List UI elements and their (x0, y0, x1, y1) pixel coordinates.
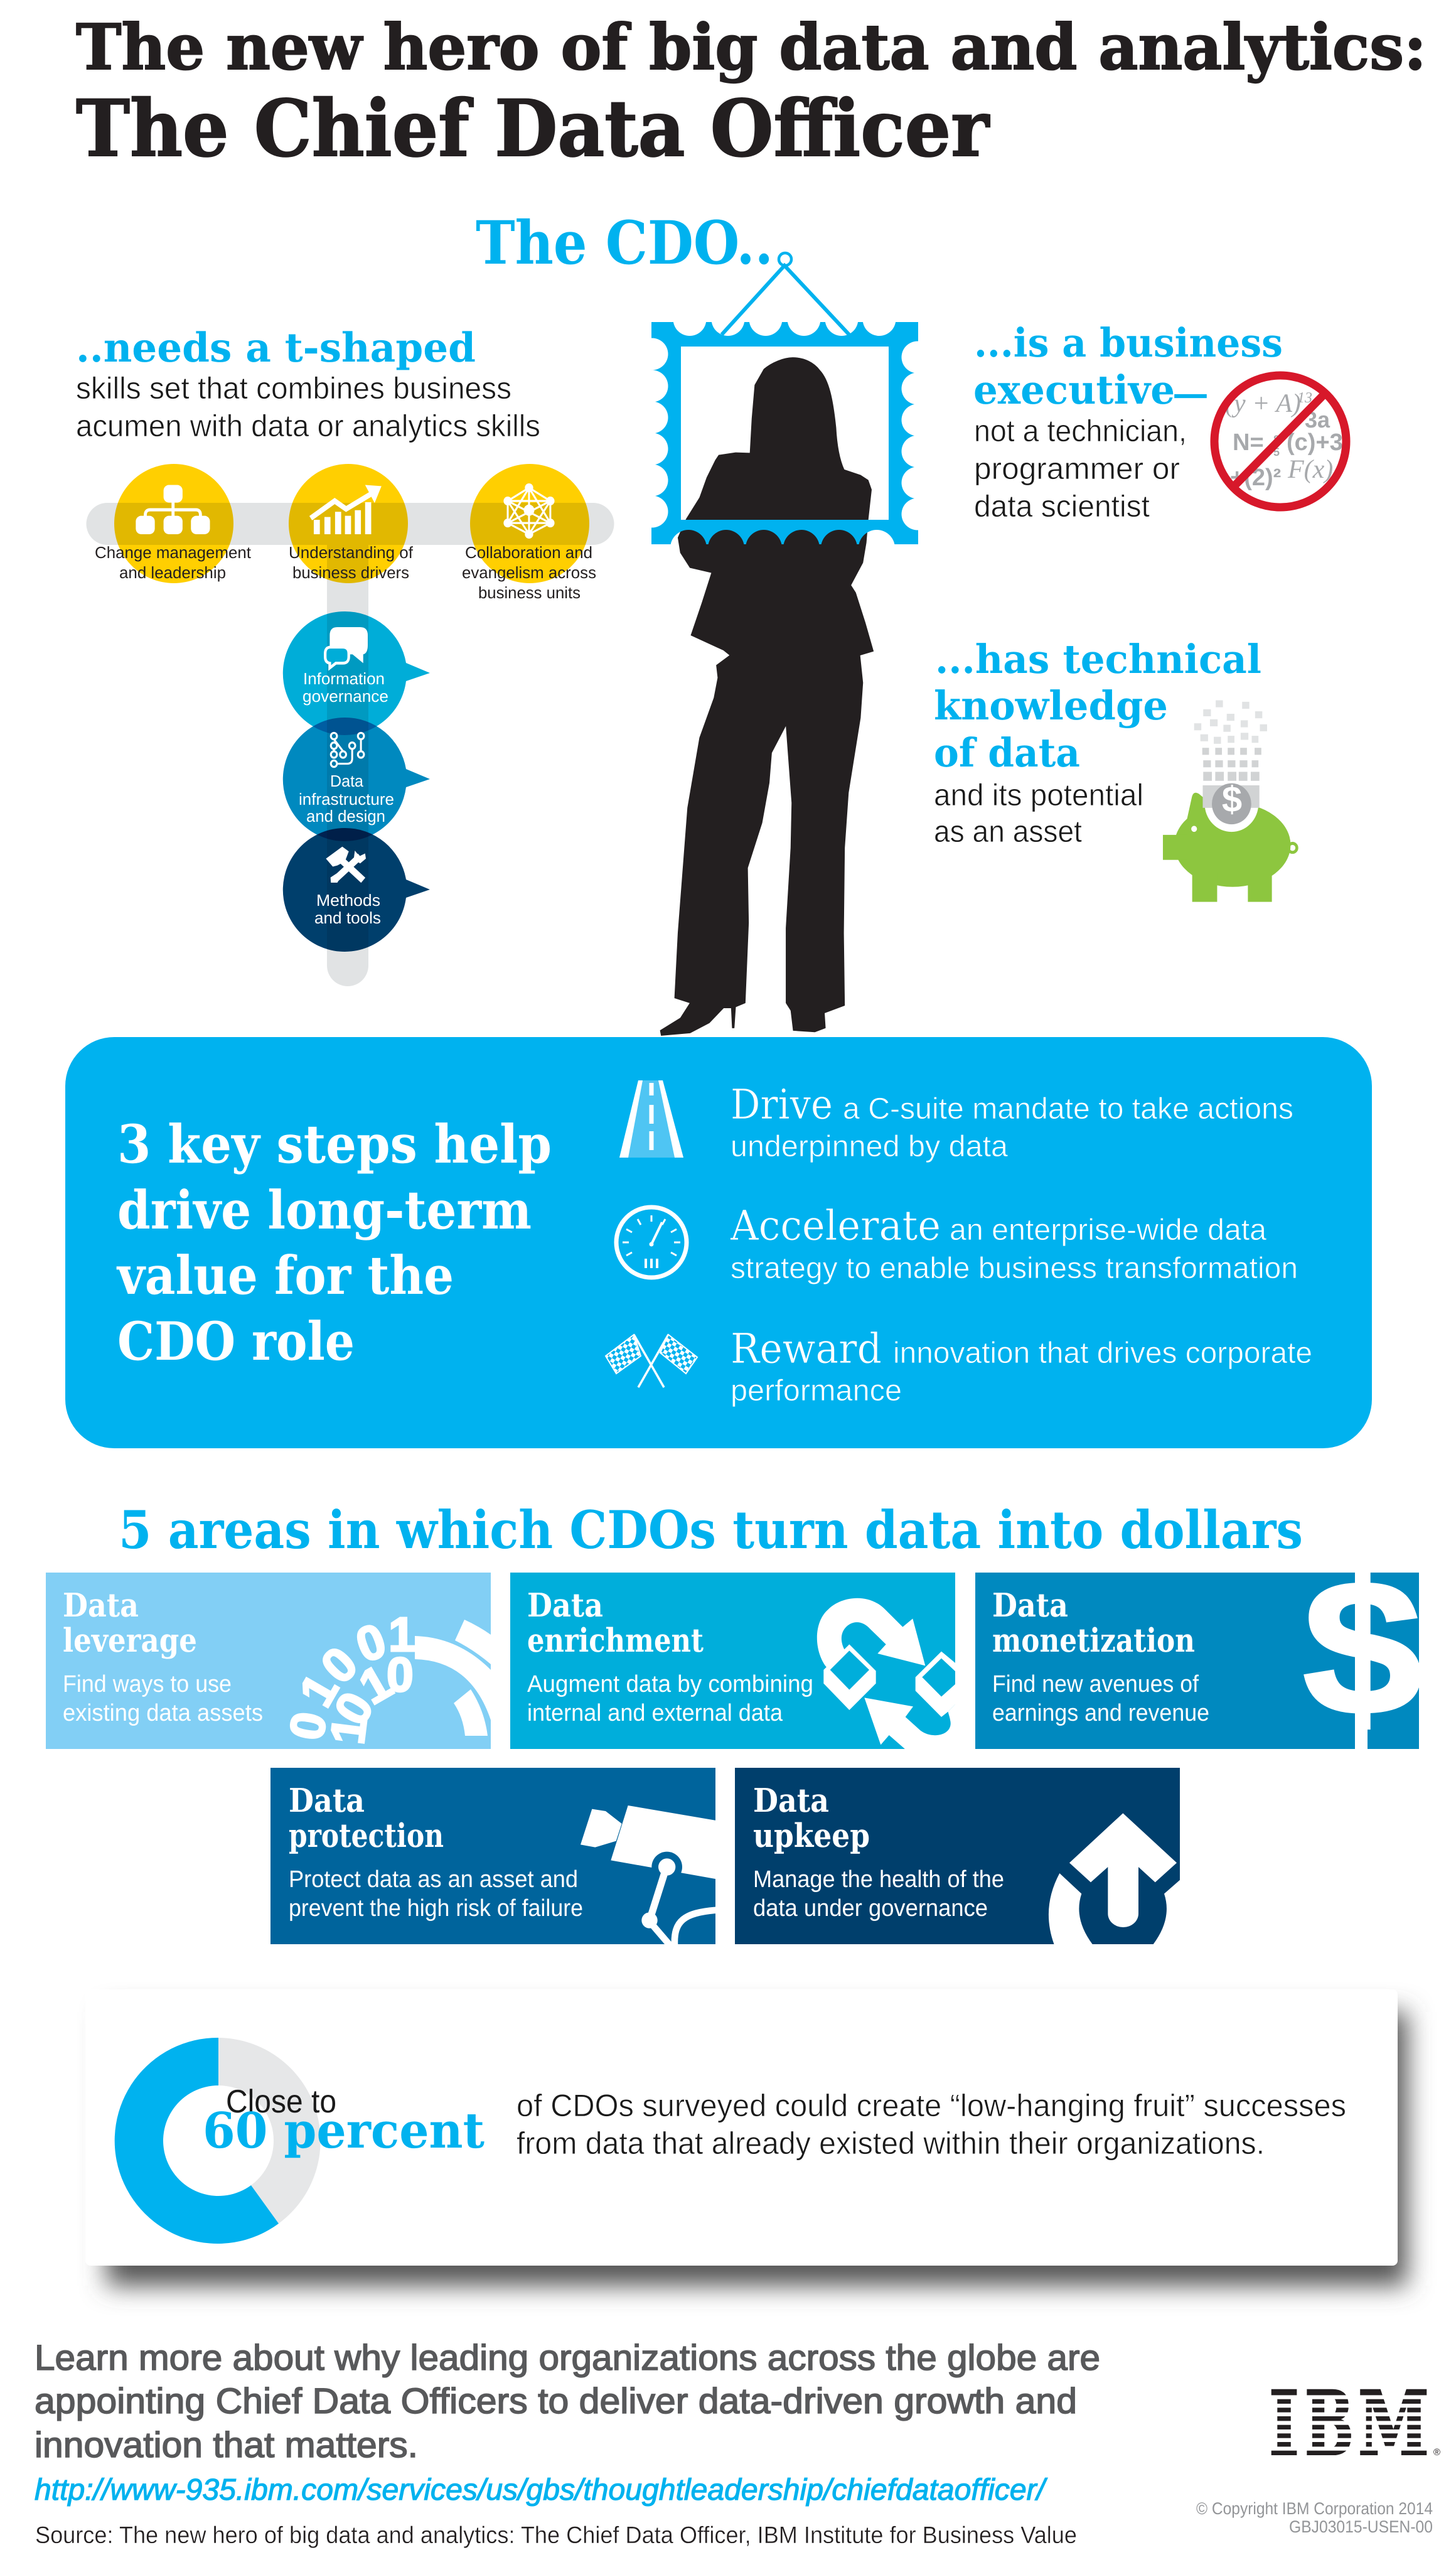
icon: up arrow and ring (1049, 1813, 1181, 1945)
card shadow (107, 2012, 1407, 2286)
text: programmer or (974, 452, 1180, 486)
heading: 3 key steps (116, 1113, 552, 1372)
heading: 3 key steps: drive long-term (117, 1179, 532, 1241)
heading (934, 636, 1261, 776)
text: upkeep (753, 1817, 870, 1855)
icon: growth chart (311, 485, 382, 534)
frame (651, 322, 918, 544)
icon: speedometer (616, 1207, 687, 1278)
labels: skill names: business drivers (292, 563, 409, 582)
text: Data (63, 1586, 139, 1625)
icon: no formulas sign: 3a (1305, 407, 1330, 433)
text: Protect data as an asset and (289, 1866, 578, 1893)
icon: tools (326, 847, 366, 883)
labels: depth skills: infrastructure (299, 790, 394, 809)
logo: IBM: M (1358, 2372, 1429, 2476)
copyright: © Copyright IBM Corporation 2014 (1196, 2499, 1433, 2518)
text: skills set description: acumen with data or analytics skills (76, 409, 540, 443)
text: drive (731, 1080, 1293, 1163)
text (63, 1586, 263, 1726)
labels: depth skills: and tools (314, 908, 381, 927)
icon: no formulas sign: 5 (1273, 446, 1280, 458)
icon: dollar sign: $ (1303, 1541, 1422, 1755)
icon: coin dollar: $ (1222, 779, 1242, 820)
text: survey finding: of CDOs surveyed could create “low-hanging fruit” successes (517, 2088, 1346, 2123)
logo: IBM: ® (1433, 2447, 1440, 2458)
heading: 3 key steps: CDO role (117, 1310, 355, 1372)
text: survey finding: from data that already existed within their organizations. (517, 2126, 1265, 2161)
text: reward: performance (731, 1374, 902, 1407)
icon: no formulas sign: N= (1233, 429, 1264, 456)
text: Data (527, 1586, 603, 1625)
text: skills set description (76, 372, 540, 443)
labels: skill names: evangelism across (462, 563, 596, 582)
icon: binary digits and arcs: 1 (321, 1714, 377, 1747)
panel: technical knowledge (934, 636, 1297, 902)
labels: skill names: business units (478, 583, 581, 602)
icon: chat bubbles (325, 627, 368, 668)
icon: chain arrows (817, 1598, 956, 1750)
text: skills set description: skills set that combines business (76, 372, 511, 406)
text: reward: innovation that drives corporate (893, 1337, 1312, 1370)
text: reward (731, 1325, 1312, 1407)
icon: binary digits and arcs: 1 (350, 1655, 401, 1715)
card: data upkeep (735, 1768, 1181, 1945)
labels: skill names (95, 543, 596, 602)
labels: depth skills: governance (302, 687, 388, 706)
labels: depth skills: Information (303, 669, 385, 688)
logo: IBM: B (1305, 2372, 1354, 2476)
text: accelerate: Accelerate (730, 1202, 941, 1250)
text: and its potential (934, 778, 1143, 812)
hanger (722, 253, 849, 335)
text: drive: a C-suite mandate to take actions (843, 1092, 1293, 1126)
heading: 3 key steps: value for the (116, 1244, 454, 1306)
card: data leverage (46, 1573, 491, 1749)
text: data scientist (974, 490, 1150, 524)
icon: yellow skill circles (114, 464, 589, 583)
labels: skill names: and leadership (119, 563, 226, 582)
heading: ...is a business (974, 320, 1283, 366)
heading: The CDO: The CDO.. (476, 208, 773, 278)
text (934, 778, 1143, 849)
copyright (1196, 2499, 1433, 2536)
heading (973, 320, 1283, 415)
heading: executive (973, 367, 1175, 413)
text: accelerate (730, 1202, 1298, 1285)
icon: binary digits and arcs: 1 (289, 1665, 349, 1715)
text: drive: Drive (731, 1080, 833, 1129)
icon: no formulas sign: F(x) (1287, 455, 1333, 484)
heading: ...has technical (935, 636, 1261, 682)
text (974, 414, 1187, 524)
icon: binary digits and arcs (290, 1617, 491, 1744)
icon: network (503, 483, 555, 539)
icon: binary digits and arcs: 1 (388, 1608, 415, 1662)
title (76, 10, 1427, 175)
labels: skill names: Collaboration and (465, 543, 592, 562)
card: data protection (270, 1768, 717, 1947)
heading: knowledge (934, 682, 1168, 729)
icon: checkered flags (606, 1335, 697, 1387)
icon: blue speech-bubble circles (283, 611, 430, 952)
labels: skill names: Understanding of (289, 543, 414, 562)
text: drive: underpinned by data (731, 1130, 1008, 1163)
text: accelerate: strategy to enable business transformation (731, 1252, 1298, 1285)
icon: binary digits and arcs: 0 (311, 1637, 368, 1694)
title: The new hero of big data and analytics: (76, 10, 1427, 84)
silhouette (660, 358, 874, 1035)
text: Data (992, 1586, 1068, 1625)
footer: learn more: appointing Chief Data Officers to deliver data-driven growth and (35, 2381, 1077, 2421)
labels: depth skills (299, 669, 394, 927)
link: report url: http://www-935.ibm.com/services/us/gbs/thoughtleadership/chiefdataofficer/ (35, 2473, 1048, 2507)
text: data under governance (753, 1895, 988, 1922)
text: enrichment (527, 1622, 704, 1660)
text: protection (289, 1817, 444, 1855)
footer: learn more (35, 2338, 1100, 2465)
text: Manage the health of the (753, 1866, 1004, 1893)
figure: woman silhouette in hanging frame (651, 253, 918, 1035)
icon: no formulas sign: +(2)² (1230, 465, 1281, 491)
labels: depth skills: and design (306, 807, 385, 826)
icon: no formulas sign: (c)+3 (1287, 429, 1343, 456)
t-shape gray bars (87, 503, 614, 986)
text: accelerate: an enterprise-wide data (950, 1213, 1266, 1247)
card (85, 1989, 1398, 2266)
logo: IBM: I (1269, 2372, 1299, 2476)
text: survey finding (517, 2088, 1346, 2161)
icon: road (619, 1080, 683, 1158)
text: Find ways to use (63, 1671, 232, 1697)
labels: skill names: Change management (95, 543, 252, 562)
label: close to: Close to (226, 2084, 336, 2120)
footer: learn more: Learn more about why leading organizations across the globe are (35, 2338, 1100, 2378)
panel: 3 key steps (65, 1037, 1372, 1448)
icon: no formulas sign: 13 (1297, 390, 1312, 406)
text (992, 1586, 1209, 1726)
panel background (65, 1037, 1372, 1448)
title: The Chief Data Officer (76, 83, 990, 175)
icon: piggy bank (1163, 700, 1297, 902)
card: data monetization (975, 1573, 1419, 1749)
heading: 5 areas: 5 areas in which CDOs turn data into dollars (119, 1499, 1303, 1561)
text: prevent the high risk of failure (289, 1895, 583, 1922)
donut chart (115, 2038, 321, 2244)
number: 60 percent: 60 percent (203, 2102, 484, 2160)
text: monetization (992, 1622, 1195, 1660)
icon: no formulas sign (1214, 375, 1346, 507)
logo: IBM (1265, 2372, 1440, 2476)
text: Data (289, 1782, 365, 1820)
icon: binary digits and arcs: 0 (324, 1683, 384, 1734)
text: Augment data by combining (527, 1671, 813, 1697)
panel: business executive (973, 320, 1346, 524)
text: Data (753, 1782, 829, 1820)
text: reward: Reward (731, 1325, 882, 1373)
text: Find new avenues of (992, 1671, 1199, 1697)
footer: learn more: innovation that matters. (35, 2425, 418, 2465)
icon: org chart (136, 485, 210, 534)
icon: binary digits and arcs: 0 (279, 1708, 337, 1744)
text: existing data assets (63, 1700, 263, 1726)
text: as an asset (934, 815, 1082, 849)
text: leverage (63, 1622, 197, 1660)
heading: 3 key steps: 3 key steps help (117, 1113, 552, 1175)
panel: t-shaped skills (76, 325, 614, 986)
text (527, 1586, 813, 1726)
text: not a technician, (974, 414, 1187, 448)
callout: 60 percent (85, 1989, 1407, 2286)
icon: circuit (331, 733, 364, 767)
text: earnings and revenue (992, 1700, 1209, 1726)
icon: binary digits and arcs: 0 (387, 1648, 414, 1702)
labels: depth skills: Methods (316, 891, 380, 910)
icon: security camera (581, 1805, 717, 1947)
text: internal and external data (527, 1700, 783, 1726)
text (289, 1782, 583, 1922)
source note: Source: The new hero of big data and analytics: The Chief Data Officer, IBM Institute for Business Value (35, 2522, 1077, 2549)
text (753, 1782, 1004, 1922)
heading: — (1175, 371, 1206, 415)
icon: binary digits and arcs: 0 (349, 1613, 393, 1673)
icon: no formulas sign: 8 (1273, 433, 1280, 446)
icon: no formulas sign: (y + A) (1225, 389, 1301, 418)
copyright: GBJ03015-USEN-00 (1289, 2517, 1433, 2536)
labels: depth skills: Data (330, 772, 364, 790)
card: data enrichment (510, 1573, 956, 1750)
heading: needs a t-shaped: ..needs a t-shaped (76, 325, 476, 372)
heading: of data (934, 729, 1080, 776)
